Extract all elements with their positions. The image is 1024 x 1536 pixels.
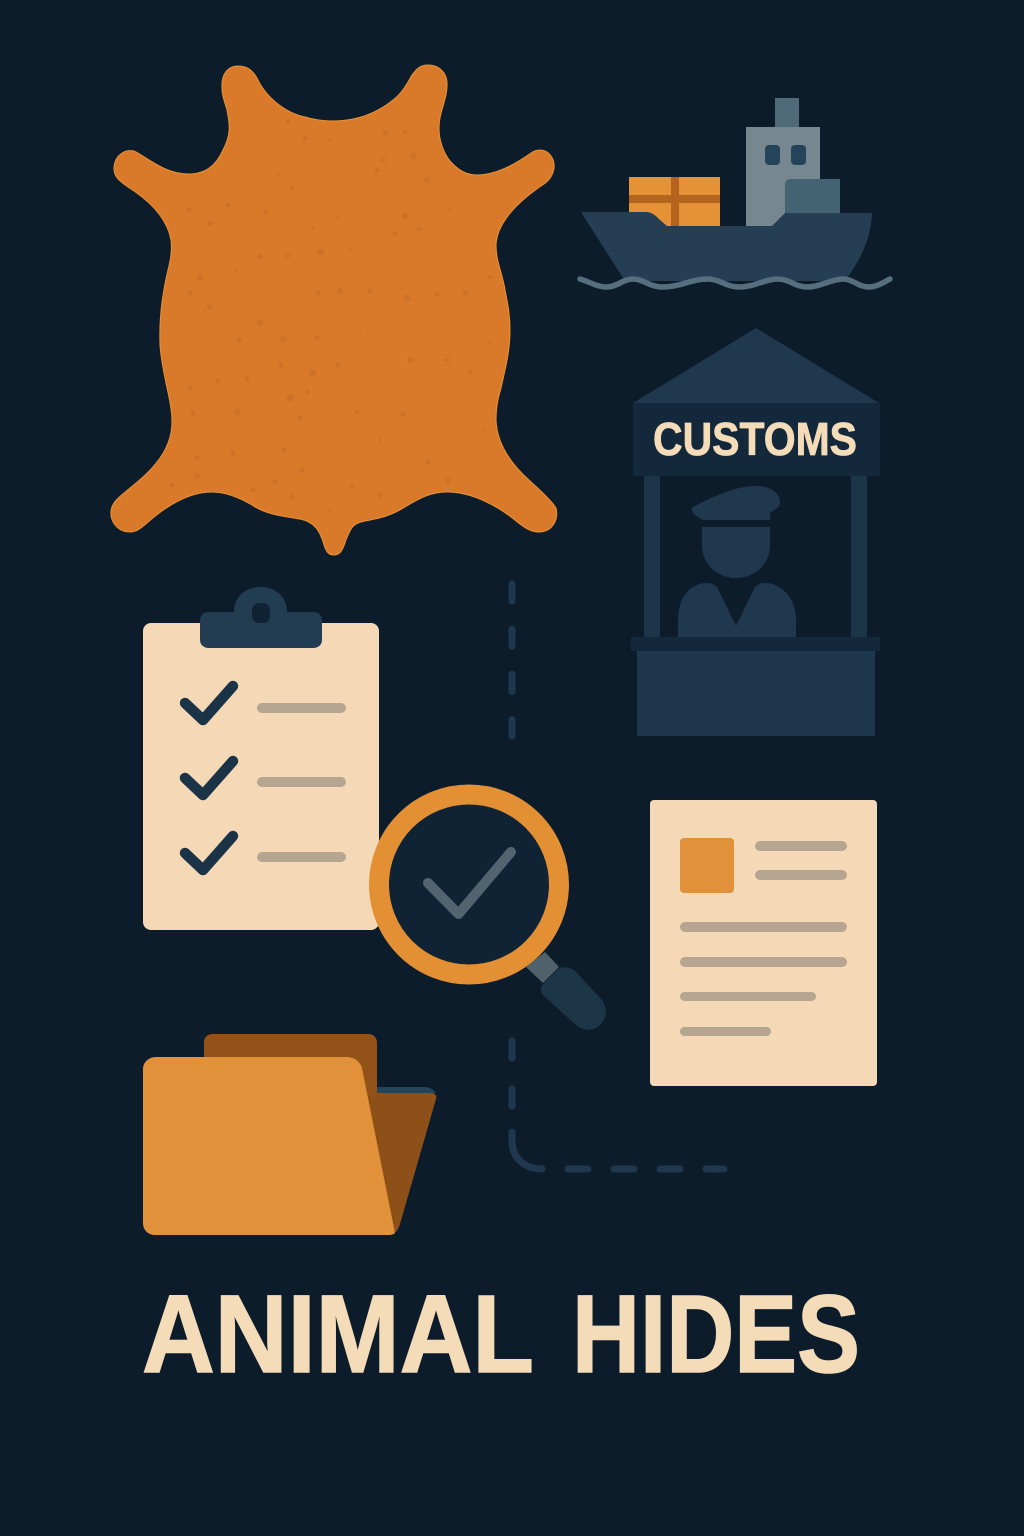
title: HIDES xyxy=(572,1273,860,1396)
checklist items xyxy=(185,686,346,870)
customs officer xyxy=(678,486,796,637)
cargo crate xyxy=(629,177,720,227)
title: ANIMAL xyxy=(142,1273,534,1396)
booth sign: CUSTOMS xyxy=(653,413,857,465)
title xyxy=(142,1273,860,1396)
ship funnel and bridge xyxy=(746,98,840,227)
icon: animal hide xyxy=(111,65,557,555)
booth roof xyxy=(633,328,879,403)
clipboard clip xyxy=(200,587,322,648)
booth sign xyxy=(633,403,880,476)
icon: document xyxy=(650,800,877,1086)
waves xyxy=(580,279,890,287)
icon: cargo ship xyxy=(580,98,890,287)
booth posts xyxy=(644,476,660,638)
icon: magnifying glass xyxy=(379,794,606,1030)
icon: clipboard checklist xyxy=(143,587,379,930)
icon: folder xyxy=(143,1034,436,1235)
booth counter xyxy=(631,637,880,736)
dashed route line xyxy=(512,584,724,1169)
ship hull xyxy=(581,212,872,281)
icon: customs booth xyxy=(631,328,880,736)
